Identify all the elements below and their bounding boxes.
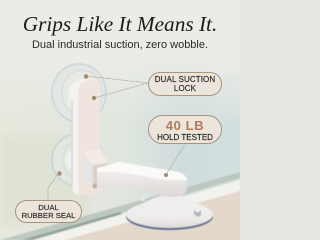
callout: 40 lb hold tested	[148, 115, 222, 144]
window sill	[0, 172, 240, 240]
base suction cup	[126, 194, 213, 230]
callout: dual suction lock: DUAL SUCTION	[155, 75, 215, 84]
callout: 40 lb hold tested: HOLD TESTED	[157, 133, 213, 142]
leader lines and dots	[48, 74, 186, 200]
callout: dual rubber seal: RUBBER SEAL	[22, 211, 75, 220]
subtitle: Dual industrial suction, zero wobble.	[32, 39, 208, 51]
title: Grips Like It Means It.	[23, 12, 217, 36]
vertical bracket plate	[71, 79, 108, 195]
callout: 40 lb hold tested: 40 LB	[166, 118, 204, 133]
callout: dual rubber seal	[15, 200, 82, 223]
product photo scene	[0, 63, 240, 240]
horizontal arm	[97, 162, 187, 197]
lower suction cup	[52, 134, 104, 186]
upper suction cup	[52, 64, 106, 122]
callout: dual rubber seal: DUAL	[38, 202, 59, 212]
callout: dual suction lock: LOCK	[174, 84, 196, 92]
callout: dual suction lock	[148, 72, 222, 96]
